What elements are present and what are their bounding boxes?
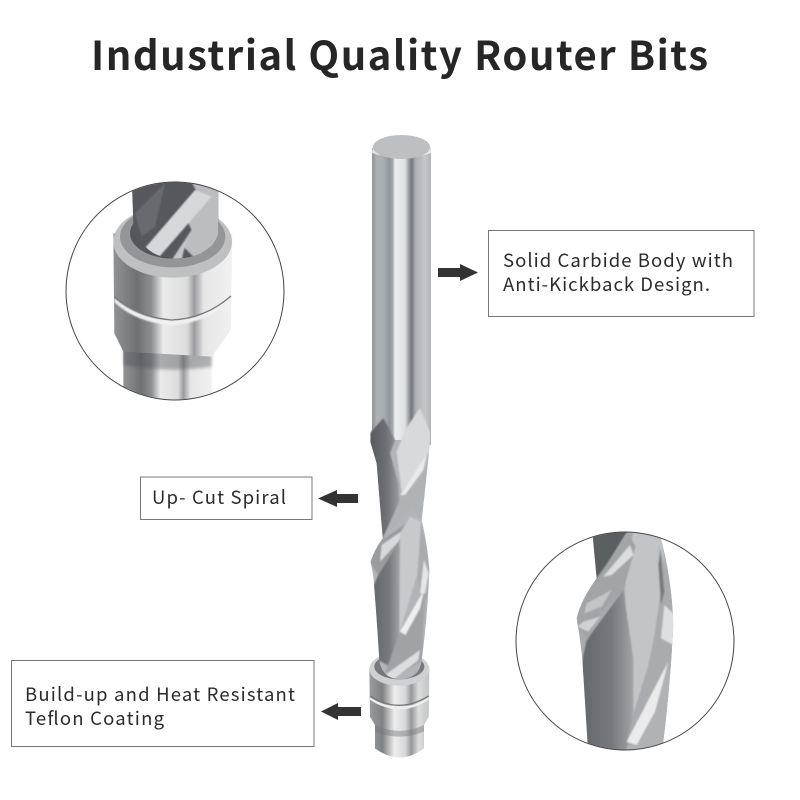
arrow: to shank label (438, 264, 478, 281)
bit flutes (370, 408, 430, 680)
bit shank (372, 135, 431, 445)
detail circle: bearing collar (66, 177, 284, 407)
title: Industrial Quality Router Bits (91, 24, 708, 82)
arrow: to up-cut label (318, 490, 358, 507)
callout: teflon coating (12, 660, 314, 746)
router bit (369, 135, 431, 758)
callout: teflon coating: Build-up and Heat Resistant (25, 681, 295, 707)
callout: solid carbide body (488, 230, 754, 316)
arrow: to coating label (321, 703, 361, 720)
callout: teflon coating: Teflon Coating (25, 705, 165, 731)
callout: solid carbide body: Anti-Kickback Design. (503, 271, 710, 297)
callout: up-cut spiral (140, 477, 312, 520)
callout: up-cut spiral: Up- Cut Spiral (152, 484, 286, 510)
bit collar (369, 652, 429, 757)
detail circle: spiral flute (516, 528, 734, 758)
callout: solid carbide body: Solid Carbide Body with (503, 247, 733, 273)
